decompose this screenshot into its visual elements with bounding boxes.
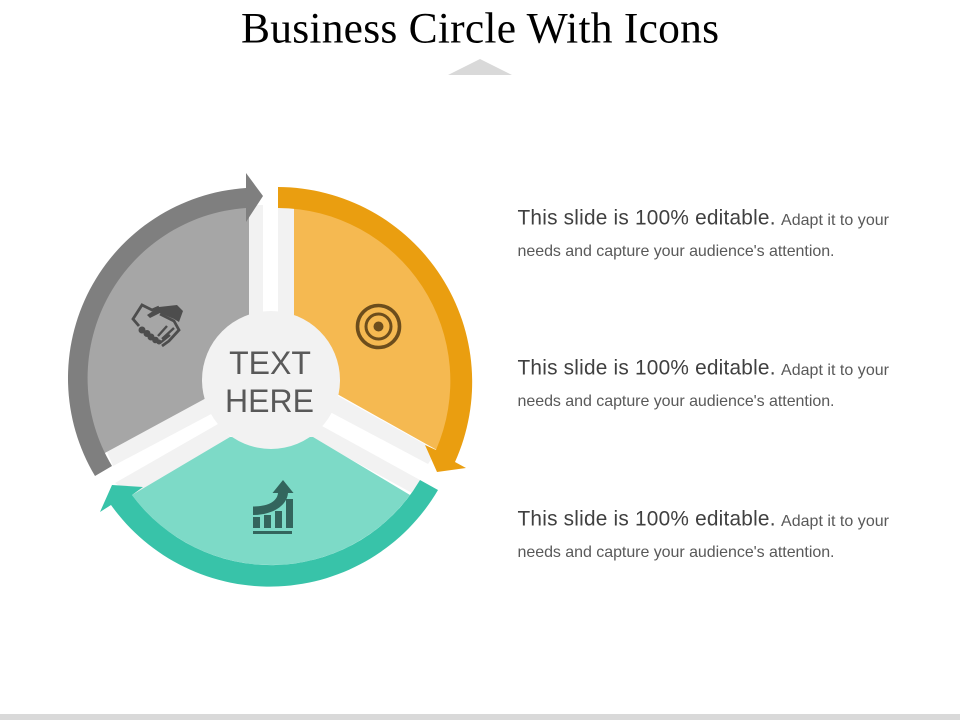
- bottom bar: [0, 714, 960, 720]
- segment: gray fan: [86, 204, 249, 454]
- arrow: gray arc: [68, 173, 263, 476]
- segment: teal fan: [132, 437, 410, 565]
- center text: TEXT: [229, 345, 311, 381]
- center circle: [202, 311, 340, 449]
- title: Business Circle With Icons: [241, 4, 719, 52]
- spoke strips: [107, 205, 437, 495]
- icon: handshake: [133, 305, 183, 346]
- text block 3: [518, 508, 890, 561]
- text block 3: needs and capture your audience's attention.: [518, 544, 834, 561]
- text block 2: [518, 356, 890, 410]
- text block 1: This slide is 100% editable.: [518, 206, 776, 230]
- text block 3: This slide is 100% editable.: [518, 508, 776, 530]
- text block 2: needs and capture your audience's attention.: [518, 393, 834, 410]
- text block 1: [518, 206, 890, 260]
- text block 3: Adapt it to your: [781, 513, 890, 530]
- segment: orange fan: [294, 205, 455, 452]
- icon: target: [358, 306, 400, 348]
- text block 2: This slide is 100% editable.: [518, 356, 776, 380]
- text block 1: Adapt it to your: [781, 212, 890, 229]
- icon: growth chart: [253, 480, 294, 534]
- title pointer triangle: [448, 59, 512, 75]
- arrow: teal arc: [100, 480, 438, 587]
- text block 2: Adapt it to your: [781, 362, 890, 379]
- text block 1: needs and capture your audience's attention.: [518, 243, 834, 260]
- center text: HERE: [225, 383, 314, 419]
- arrow: orange arc: [278, 187, 472, 472]
- cycle diagram: [68, 173, 472, 587]
